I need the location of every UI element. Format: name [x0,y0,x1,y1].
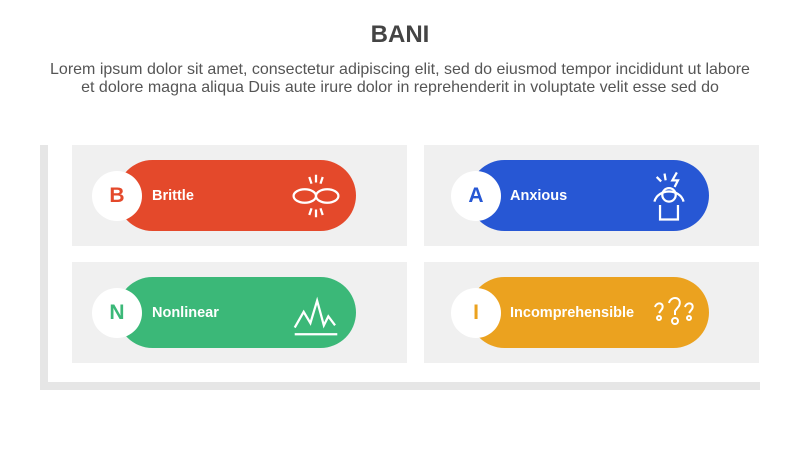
letter circle B: B [109,184,125,207]
subtitle: Lorem ipsum dolor sit amet, consectetur adipiscing elit, sed do eiusmod tempor incididunt ut labore [50,61,750,78]
icon: stressed person [653,172,685,221]
pill: anxious [469,160,709,231]
letter circle A [451,171,501,221]
icon: question marks [654,297,694,325]
panel: brittle [72,145,407,246]
pill: anxious: Anxious [510,188,567,204]
pill: incomprehensible: Incomprehensible [510,305,634,321]
icon: line graph [294,296,338,336]
pill: nonlinear [117,277,356,348]
letter circle N [92,288,142,338]
pill: incomprehensible [469,277,709,348]
letter circle B [92,171,142,221]
pill: brittle: Brittle [152,188,194,204]
panel: nonlinear [72,262,407,363]
subtitle [50,61,750,96]
icon: broken chain [292,174,340,218]
letter circle I [451,288,501,338]
pill: nonlinear: Nonlinear [152,305,219,321]
panel: anxious [424,145,759,246]
title: BANI [371,21,429,48]
frame [40,145,48,390]
pill: brittle [117,160,356,231]
letter circle N: N [109,301,125,324]
panel: incomprehensible [424,262,759,363]
letter circle I: I [473,301,479,324]
letter circle A: A [468,184,484,207]
subtitle: et dolore magna aliqua Duis aute irure dolor in reprehenderit in voluptate velit esse sed do [81,79,719,96]
